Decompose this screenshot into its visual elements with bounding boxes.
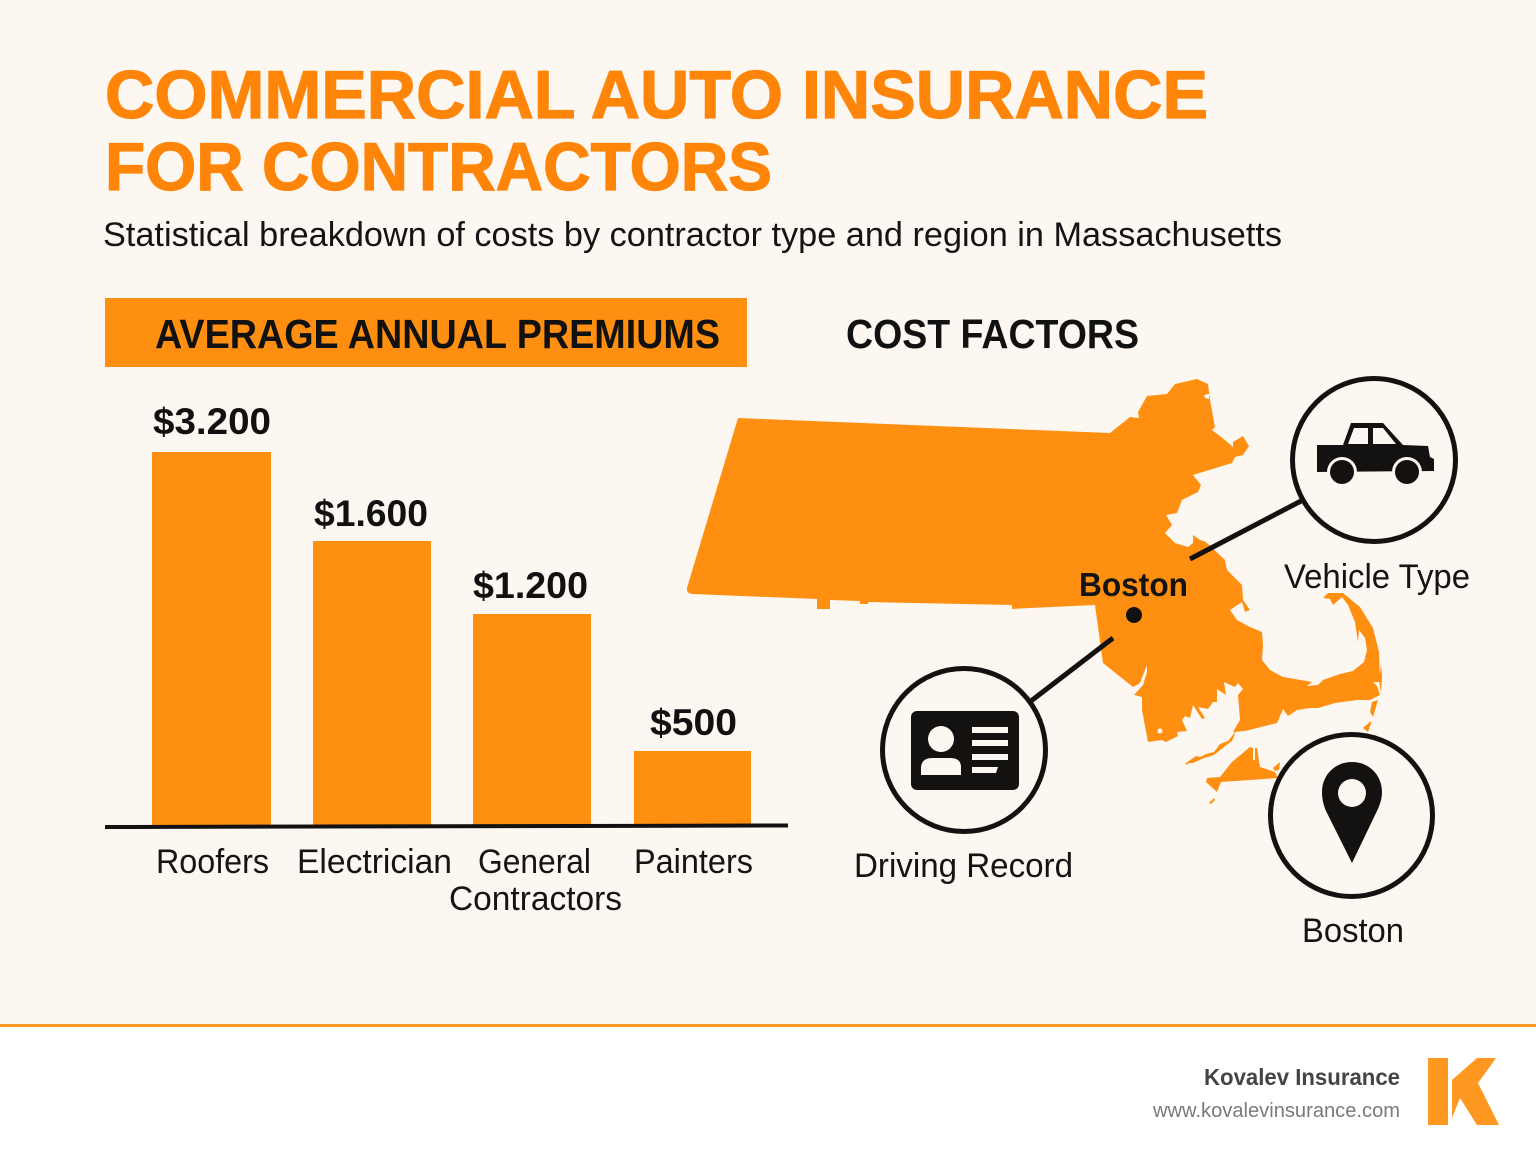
bar: general contractors: Contractors xyxy=(449,880,622,918)
bar chart xyxy=(105,401,788,918)
panel: average annual premiums xyxy=(105,298,788,918)
label: driving record: Driving Record xyxy=(854,847,1073,885)
map: outer cape fragments xyxy=(1209,665,1382,804)
callout line: driving record xyxy=(1031,638,1113,701)
bar: roofers xyxy=(152,401,271,881)
bar: painters: $500 xyxy=(650,702,737,743)
footer website: www.kovalevinsurance.com xyxy=(1152,1100,1400,1122)
icon: vehicle type xyxy=(1292,378,1456,542)
map: elizabeth islands xyxy=(1185,731,1236,765)
map label: boston xyxy=(1079,566,1188,623)
heading: cost factors: COST FACTORS xyxy=(846,311,1139,357)
icon: location pin xyxy=(1270,734,1432,896)
bar: general contractors xyxy=(449,565,622,918)
callout line: vehicle type xyxy=(1190,501,1301,559)
map: massachusetts xyxy=(687,379,1382,804)
bar: electrician xyxy=(297,493,452,881)
bar: painters: Painters xyxy=(634,843,753,881)
label: vehicle type: Vehicle Type xyxy=(1284,558,1470,596)
chart axis xyxy=(105,826,788,827)
heading banner: average annual premiums xyxy=(105,298,747,367)
title xyxy=(105,57,1208,205)
bar: roofers: Roofers xyxy=(156,843,269,881)
bar: general contractors: $1.200 xyxy=(473,565,588,606)
footer xyxy=(0,1024,1536,1154)
icon: driving record xyxy=(882,668,1046,832)
title: FOR CONTRACTORS xyxy=(105,129,772,205)
footer brand name: Kovalev Insurance xyxy=(1204,1064,1400,1090)
title: COMMERCIAL AUTO INSURANCE xyxy=(105,57,1208,133)
map: martha's vineyard xyxy=(1206,747,1278,792)
label: boston: Boston xyxy=(1302,912,1404,950)
bar: roofers: $3.200 xyxy=(153,401,271,442)
heading banner: average annual premiums: AVERAGE ANNUAL PREMIUMS xyxy=(155,311,720,357)
bar: general contractors: General xyxy=(478,843,591,881)
bar: painters xyxy=(634,702,753,881)
map: knockouts xyxy=(1158,394,1209,734)
bar: electrician: $1.600 xyxy=(314,493,428,534)
logo: K xyxy=(1428,1058,1499,1125)
map label: boston: Boston xyxy=(1079,566,1188,603)
subtitle: Statistical breakdown of costs by contractor type and region in Massachusetts xyxy=(103,216,1282,254)
bar: electrician: Electrician xyxy=(297,843,452,881)
